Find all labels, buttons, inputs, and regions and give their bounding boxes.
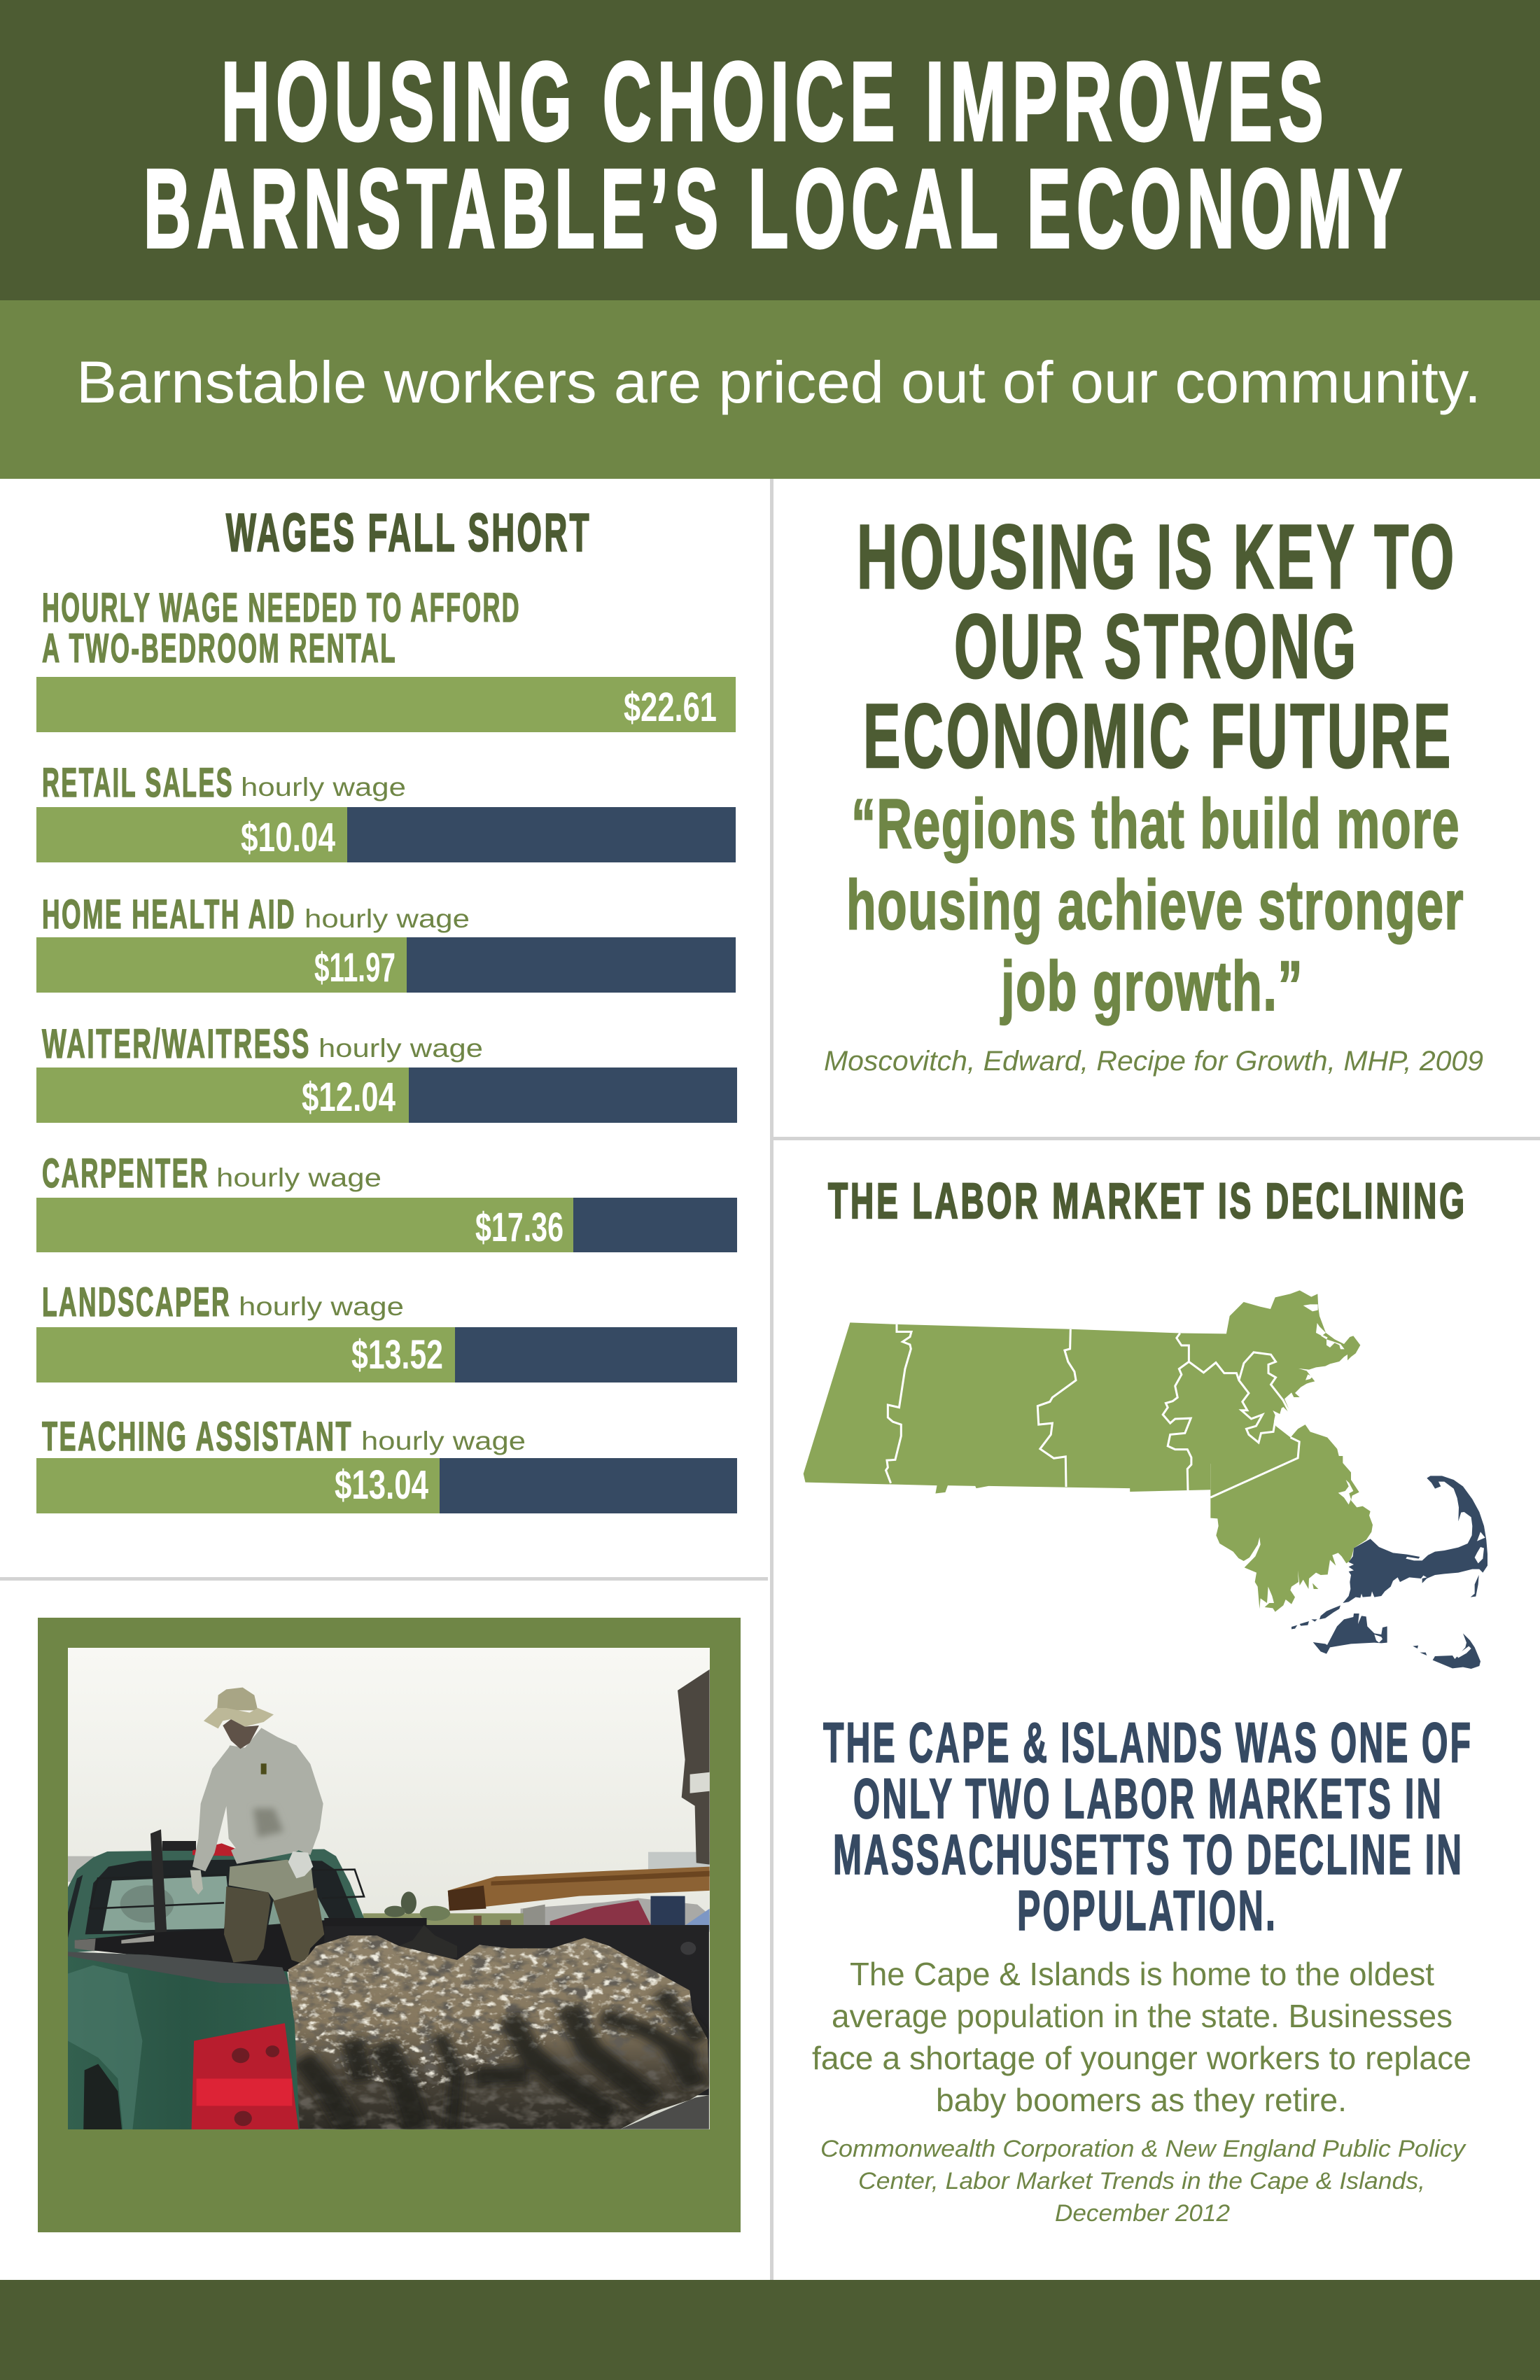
- citation: [820, 2136, 1466, 2227]
- bar: waiter/waitress: $12.04: [302, 1074, 396, 1120]
- bar: waiter/waitress: [36, 1021, 737, 1123]
- citation: December 2012: [1055, 2200, 1230, 2227]
- body text: [812, 1956, 1471, 2118]
- bar: two-bedroom rental wage: [36, 585, 736, 732]
- bar: landscaper: hourly wage: [239, 1292, 404, 1321]
- map: Massachusetts with Cape and Islands highlighted: [804, 1290, 1488, 1669]
- heading: housing is key: [857, 505, 1457, 787]
- photo: oyster worker on pickup truck: [68, 1648, 710, 2130]
- bar: carpenter: $17.36: [475, 1205, 564, 1250]
- bar: two-bedroom rental wage: $22.61: [624, 685, 717, 730]
- subtitle text: Barnstable workers are priced out of our community.: [76, 349, 1481, 415]
- bar: home health aid: HOME HEALTH AID: [42, 892, 296, 937]
- map region: western and central counties: [804, 1322, 1343, 1494]
- body text: face a shortage of younger workers to replace: [812, 2040, 1471, 2076]
- bar: landscaper: $13.52: [351, 1332, 443, 1378]
- bar: home health aid: [36, 892, 736, 993]
- bar: carpenter: hourly wage: [216, 1163, 382, 1192]
- map region: northeast coast: [1226, 1290, 1360, 1421]
- heading: cape and islands decline: POPULATION.: [1017, 1879, 1278, 1942]
- truck cab, rack and worker: [68, 1687, 365, 1972]
- quote: [846, 785, 1464, 1026]
- title: [144, 38, 1408, 271]
- background scenery and machinery: [448, 1670, 710, 1932]
- bar: home health aid: $11.97: [314, 945, 396, 990]
- subtitle band: [0, 300, 1540, 479]
- bar: two-bedroom rental wage: HOURLY WAGE NEEDED TO AFFORD: [42, 585, 521, 631]
- bar: retail sales: RETAIL SALES: [42, 760, 234, 806]
- citation: Commonwealth Corporation & New England Public Policy: [820, 2136, 1466, 2162]
- bar: two-bedroom rental wage: A TWO-BEDROOM RENTAL: [42, 626, 397, 671]
- body text: average population in the state. Businesses: [832, 1998, 1452, 2034]
- body text: baby boomers as they retire.: [936, 2082, 1347, 2118]
- citation: Center, Labor Market Trends in the Cape & Islands,: [858, 2168, 1425, 2194]
- panel: photo frame: [38, 1618, 741, 2232]
- body text: The Cape & Islands is home to the oldest: [850, 1956, 1434, 1992]
- panel: wages fall short: [36, 503, 737, 1513]
- map: county boundaries: [886, 1324, 1299, 1497]
- heading: cape and islands decline: [823, 1712, 1473, 1942]
- bar: waiter/waitress: hourly wage: [318, 1034, 483, 1063]
- bar: teaching assistant: [36, 1414, 737, 1513]
- map region: Cape Cod and the Islands: [1292, 1476, 1488, 1669]
- bar: teaching assistant: TEACHING ASSISTANT: [42, 1414, 353, 1460]
- footer band: [0, 2280, 1540, 2380]
- bar: retail sales: [36, 760, 736, 862]
- quote: job growth.”: [1000, 947, 1303, 1026]
- bar: landscaper: LANDSCAPER: [42, 1280, 231, 1325]
- map region: southeast and Plymouth: [1210, 1456, 1373, 1612]
- bar: teaching assistant: $13.04: [335, 1462, 428, 1508]
- bar: waiter/waitress: WAITER/WAITRESS: [42, 1021, 311, 1067]
- panel dividers: [0, 479, 1540, 2280]
- citation: Moscovitch, Edward, Recipe for Growth, MHP, 2009: [824, 1046, 1483, 1077]
- truck tailgate corner, fender and taillight: [68, 1952, 300, 2129]
- panel: labor market: [804, 1174, 1488, 2227]
- bar: landscaper: [36, 1280, 737, 1382]
- bar: retail sales: hourly wage: [241, 773, 406, 802]
- header band with title: [0, 0, 1540, 300]
- bar: carpenter: [36, 1151, 737, 1252]
- oyster pile in nets: [288, 1918, 709, 2130]
- panel: housing is key: [824, 505, 1483, 1077]
- heading: wages fall short: WAGES FALL SHORT: [226, 503, 592, 563]
- bar: teaching assistant: hourly wage: [361, 1427, 526, 1455]
- bar: retail sales: $10.04: [241, 815, 335, 860]
- bar: carpenter: CARPENTER: [42, 1151, 209, 1196]
- bar: home health aid: hourly wage: [304, 904, 470, 933]
